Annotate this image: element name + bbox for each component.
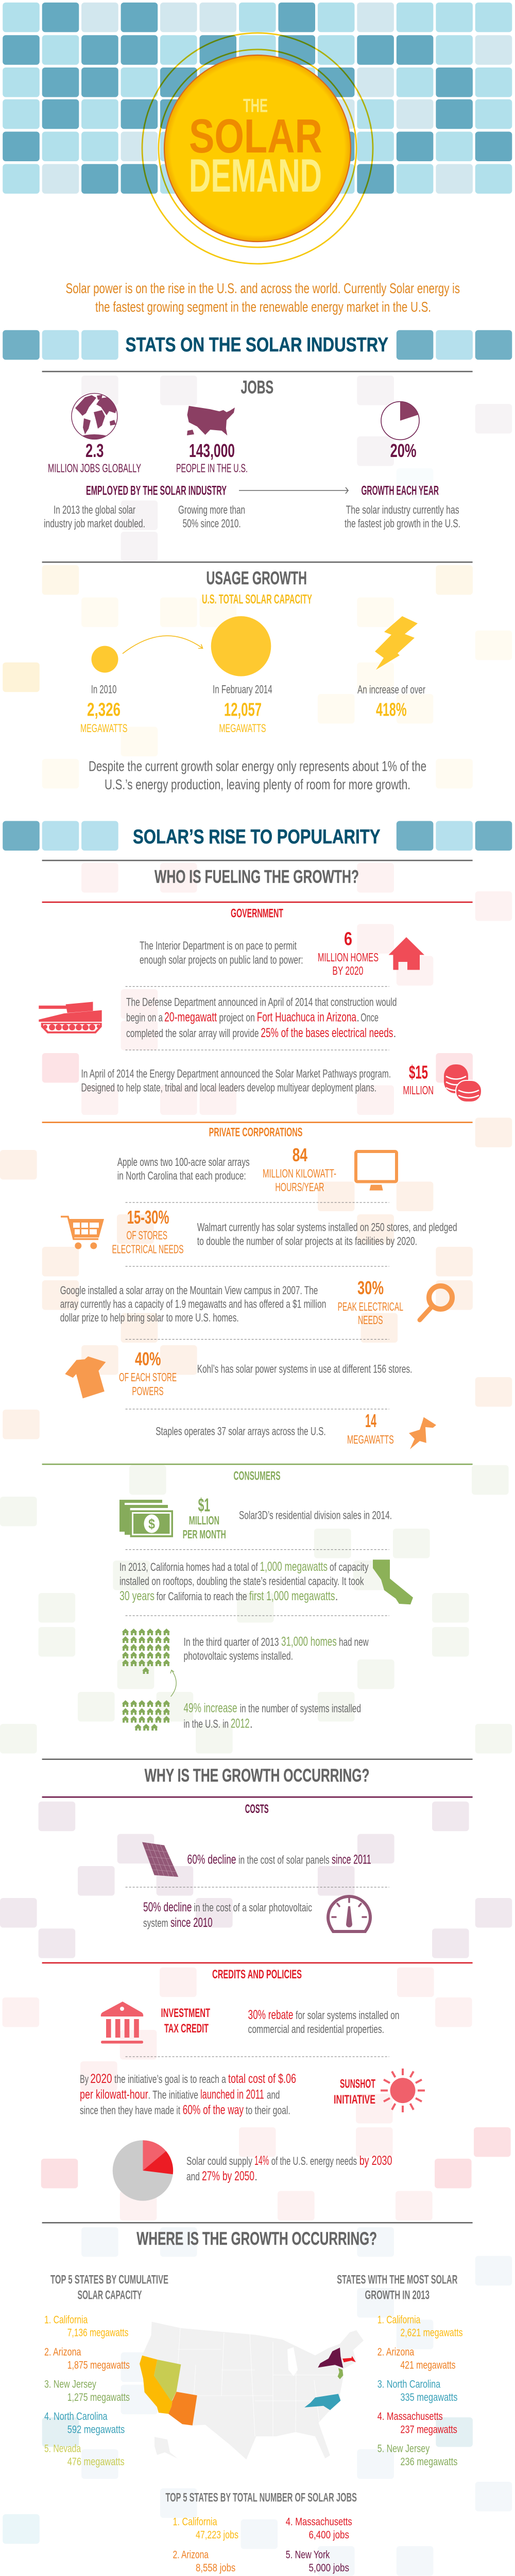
icon: magnifying glass xyxy=(420,1286,452,1320)
text: job market xyxy=(44,503,145,530)
text: 49 percent increase: . xyxy=(250,1718,253,1730)
stat: 30 percent peak needs: 30% xyxy=(357,1277,384,1298)
list: most growth in 2013: 5. New Jersey xyxy=(377,2443,430,2455)
text: 50 percent decline xyxy=(143,1900,312,1930)
list: top 5 by jobs: 5. New York xyxy=(286,2549,330,2561)
map: united states with highlighted states xyxy=(140,2321,364,2460)
heading: why is the growth occurring: WHY IS THE GROWTH OCCURRING? xyxy=(145,1765,370,1786)
title: THE xyxy=(243,95,268,116)
text: 50 percent decline: in the cost of a solar photovoltaic xyxy=(194,1901,312,1914)
label: sunshot initiative: INITIATIVE xyxy=(334,2093,375,2107)
text: 60 percent decline xyxy=(187,1853,371,1867)
list: top 5 by cumulative capacity: 1,275 megawatts xyxy=(67,2392,130,2403)
list: most growth in 2013: 3. North Carolina xyxy=(377,2379,440,2391)
icon: shopping cart xyxy=(61,1217,104,1249)
stat: 143,000 people: 143,000 xyxy=(189,440,235,461)
panel: costs xyxy=(126,1802,389,1931)
heading: who is fueling the growth: WHO IS FUELING THE GROWTH? xyxy=(154,867,359,887)
text: california rooftops: 30 years xyxy=(119,1589,154,1603)
heading: usage growth: USAGE GROWTH xyxy=(206,568,307,588)
text: apple: Apple owns two 100-acre solar arrays xyxy=(117,1156,250,1168)
text: apple: in North Carolina that each produce: xyxy=(117,1169,246,1182)
text: fastest job growth xyxy=(345,503,460,530)
list title: cumulative capacity: SOLAR CAPACITY xyxy=(77,2288,142,2302)
text: fastest job growth: the fastest job growth in the U.S. xyxy=(345,517,460,530)
text: google: array currently has a capacity of 1.9 megawatts and has offered a $1 million xyxy=(60,1297,326,1310)
text: california rooftops: for California to reach the xyxy=(157,1590,247,1603)
stat: 84 million kilowatt-hours: 84 xyxy=(293,1144,307,1165)
list: top 5 by cumulative capacity: 2. Arizona xyxy=(44,2346,81,2358)
section banner: stats on the solar industry: STATS ON THE SOLAR INDUSTRY xyxy=(126,334,388,356)
list: top 5 by cumulative capacity: 3. New Jersey xyxy=(44,2379,96,2391)
icon: house xyxy=(388,937,424,970)
text: 31,000 homes: In the third quarter of 2013 xyxy=(183,1636,279,1649)
text: sunshot goal xyxy=(80,2072,296,2117)
icon: cash: $ xyxy=(148,1516,155,1532)
large sun 2014 xyxy=(211,616,271,676)
text: could supply: 27% by 2050 xyxy=(202,2169,254,2183)
icon: previous homes xyxy=(122,1700,170,1731)
heading: where is the growth occurring: WHERE IS THE GROWTH OCCURRING? xyxy=(136,2228,377,2249)
panel: private corporations xyxy=(60,1126,457,1449)
title: SOLAR xyxy=(189,109,322,163)
text: 31,000 homes xyxy=(183,1635,369,1663)
stat: 1 million per month: PER MONTH xyxy=(183,1528,226,1541)
text: sunshot goal: By xyxy=(80,2073,89,2086)
panel: government xyxy=(39,906,482,1102)
panel: where is the growth occurring xyxy=(44,2228,463,2576)
arrow: growth between house groups xyxy=(170,1670,176,1697)
list: top 5 by cumulative capacity: 7,136 megawatts xyxy=(67,2327,128,2339)
list: top 5 by cumulative capacity xyxy=(44,2314,130,2468)
icon: gauge xyxy=(328,1896,370,1931)
stat: 15 million xyxy=(403,1061,434,1097)
text: sunshot goal: since then they have made it xyxy=(80,2104,180,2117)
stat: 40 percent: OF EACH STORE xyxy=(119,1370,177,1384)
list: top 5 by jobs: 47,223 jobs xyxy=(196,2529,238,2541)
text: 60 percent decline: since 2011 xyxy=(332,1853,371,1867)
list: most growth in 2013: 237 megawatts xyxy=(400,2424,457,2435)
text: sunshot goal: to their goal. xyxy=(246,2104,290,2117)
list: most growth in 2013: 4. Massachusetts xyxy=(377,2411,443,2422)
list: top 5 by cumulative capacity: 592 megawatts xyxy=(67,2424,125,2435)
text: google xyxy=(60,1284,326,1324)
icon: 31,000 homes xyxy=(122,1629,170,1674)
text: sunshot goal: . The initiative xyxy=(148,2089,198,2101)
text: 49 percent increase: in the U.S. in xyxy=(183,1718,229,1730)
stat: 15 million: $15 xyxy=(409,1061,428,1083)
text: sunshot goal: 2020 xyxy=(90,2072,112,2086)
hero: solar panel grid and sun title xyxy=(3,3,512,264)
list: most growth in 2013: 2,621 megawatts xyxy=(400,2327,463,2339)
text: sunshot goal: and xyxy=(267,2089,280,2101)
stat: 20 percent: 20% xyxy=(390,440,417,461)
list: top 5 by jobs: 8,558 jobs xyxy=(196,2562,235,2574)
list: top 5 by cumulative capacity: 476 megawatts xyxy=(67,2456,125,2468)
stat: 84 million kilowatt-hours: HOURS/YEAR xyxy=(275,1180,324,1194)
stat: 2014: In February 2014 xyxy=(213,683,272,696)
stat: 2010 xyxy=(80,683,127,735)
stat: 14 megawatts: 14 xyxy=(365,1410,376,1431)
stat: increase: 418% xyxy=(376,699,407,720)
label: employed by the solar industry: EMPLOYED BY THE SOLAR INDUSTRY xyxy=(86,483,227,498)
chart: 20 percent pie xyxy=(381,402,419,440)
text: job market: In 2013 the global solar xyxy=(54,503,135,516)
list: most growth in 2013: 236 megawatts xyxy=(400,2456,457,2468)
list: most growth in 2013 xyxy=(377,2314,463,2468)
text: california rooftops: . xyxy=(335,1590,338,1603)
text: defense department: The Defense Department announced in April of 2014 that construction would xyxy=(126,996,397,1009)
text: staples: Staples operates 37 solar arrays across the U.S. xyxy=(156,1425,326,1438)
list: top 5 by jobs: 1. California xyxy=(173,2516,217,2528)
list title: solar jobs: TOP 5 STATES BY TOTAL NUMBER OF SOLAR JOBS xyxy=(165,2490,357,2505)
text: google: Google installed a solar array on the Mountain View campus in 2007. The xyxy=(60,1284,318,1297)
list: most growth in 2013: 421 megawatts xyxy=(400,2360,456,2371)
list: most growth in 2013: 2. Arizona xyxy=(377,2346,414,2358)
list: top 5 by cumulative capacity: 1. California xyxy=(44,2314,88,2326)
subheading: consumers: CONSUMERS xyxy=(233,1469,281,1483)
stat: 2010: In 2010 xyxy=(91,683,116,696)
stat: 15 million: MILLION xyxy=(403,1083,434,1097)
label: growth each year: GROWTH EACH YEAR xyxy=(362,483,439,498)
text: kohl's: Kohl’s has solar power systems in use at different 156 stores. xyxy=(197,1362,412,1376)
icon: tank xyxy=(39,1002,102,1033)
stat: 2.3 million jobs: MILLION JOBS GLOBALLY xyxy=(48,461,141,474)
label: investment tax credit: INVESTMENT xyxy=(161,2006,210,2020)
text: sunshot goal: per kilowatt-hour xyxy=(80,2088,148,2102)
text: 30 percent rebate: for solar systems installed on xyxy=(296,2009,400,2022)
list: top 5 by jobs: 4. Massachusetts xyxy=(286,2516,352,2528)
text: 31,000 homes: 31,000 homes xyxy=(281,1635,337,1649)
icon: lightning bolt xyxy=(375,616,418,670)
title: DEMAND xyxy=(189,150,322,202)
subheading: costs: COSTS xyxy=(245,1802,269,1816)
stat: 40 percent: 40% xyxy=(135,1348,161,1369)
text: california rooftops: first 1,000 megawatts xyxy=(249,1589,335,1603)
text: defense department: completed the solar array will provide xyxy=(126,1027,259,1040)
text: 49 percent increase: 49% increase xyxy=(183,1701,237,1716)
stat: 40 percent xyxy=(119,1348,177,1398)
chart: share of us energy pie xyxy=(113,2140,173,2201)
stat: 2014 xyxy=(213,683,272,735)
text: california rooftops: of capacity xyxy=(330,1561,369,1573)
sun rings xyxy=(142,33,373,264)
text: could supply: 14% xyxy=(254,2154,269,2168)
stat: 1 million per month: $1 xyxy=(198,1494,210,1516)
list: top 5 by jobs: 6,400 jobs xyxy=(309,2529,349,2541)
text: 50 percent decline: since 2010 xyxy=(170,1916,213,1930)
icon: bank xyxy=(101,2002,143,2043)
text: 30 percent rebate: 30% rebate xyxy=(248,2008,294,2022)
subheading: government: GOVERNMENT xyxy=(231,906,283,920)
stat: 6 million homes: MILLION HOMES xyxy=(318,951,379,964)
stat: 2010: MEGAWATTS xyxy=(80,722,127,735)
list title: most growth: GROWTH IN 2013 xyxy=(365,2288,430,2302)
icon: solar panel xyxy=(142,1842,178,1877)
stat: 2010: 2,326 xyxy=(87,699,121,720)
icon: t-shirt xyxy=(65,1357,106,1398)
list: top 5 by cumulative capacity: 4. North Carolina xyxy=(44,2411,108,2422)
list title: cumulative capacity: TOP 5 STATES BY CUMULATIVE xyxy=(50,2273,168,2287)
text: interior department: The Interior Department is on pace to permit xyxy=(140,939,297,952)
text: sunshot goal: launched in 2011 xyxy=(200,2088,264,2102)
label: investment tax credit: TAX CREDIT xyxy=(164,2022,209,2036)
text: 60 percent decline: in the cost of solar panels xyxy=(238,1854,330,1867)
small sun 2010 xyxy=(92,646,118,673)
text: google: dollar prize to help bring solar to more U.S. homes. xyxy=(60,1311,239,1324)
list: most growth in 2013: 335 megawatts xyxy=(400,2392,457,2403)
stat: 30 percent peak needs xyxy=(338,1277,403,1327)
stat: 143,000 people xyxy=(176,440,248,474)
intro text xyxy=(66,280,460,315)
text: could supply: by 2030 xyxy=(359,2154,392,2168)
text: energy department xyxy=(81,1067,391,1094)
stat: 143,000 people: PEOPLE IN THE U.S. xyxy=(176,461,248,474)
text: defense department: begin on a xyxy=(126,1011,163,1024)
stat: 2.3 million jobs xyxy=(48,440,141,474)
text: defense department xyxy=(126,996,397,1040)
text: sunshot goal: the initiative’s goal is to reach a xyxy=(114,2073,226,2086)
list: top 5 by cumulative capacity: 5. Nevada xyxy=(44,2443,81,2455)
text: apple xyxy=(117,1156,250,1182)
subheading: private corporations: PRIVATE CORPORATIONS xyxy=(209,1126,302,1140)
text: 49 percent increase: 2012 xyxy=(231,1717,250,1731)
stat: 14 megawatts: MEGAWATTS xyxy=(347,1433,394,1446)
panel: jobs xyxy=(44,377,460,530)
text: growing: Growing more than xyxy=(178,503,245,516)
stat: 2.3 million jobs: 2.3 xyxy=(85,440,104,461)
text: walmart xyxy=(197,1221,457,1247)
title xyxy=(189,95,322,202)
text: could supply: . xyxy=(254,2170,258,2183)
list: top 5 by jobs xyxy=(173,2516,352,2576)
text: growing xyxy=(178,503,245,530)
stat: 30 percent peak needs: PEAK ELECTRICAL xyxy=(338,1300,403,1313)
stat: 6 million homes: BY 2020 xyxy=(332,964,363,977)
text: defense department: . xyxy=(356,1011,359,1024)
list title: cumulative capacity xyxy=(50,2273,168,2302)
text: energy department: In April of 2014 the Energy Department announced the Solar Market Pathways program. xyxy=(81,1067,391,1080)
text: defense department: . xyxy=(393,1027,397,1040)
text: could supply: and xyxy=(186,2170,200,2183)
section banner: stats on the solar industry xyxy=(3,330,512,360)
icon: globe xyxy=(72,394,117,443)
text: walmart: to double the number of solar projects at its facilities by 2020. xyxy=(197,1234,417,1247)
list title: most growth xyxy=(337,2273,457,2302)
text: 30 percent rebate xyxy=(248,2008,400,2036)
text: california rooftops: In 2013, California homes had a total of xyxy=(119,1561,258,1573)
solar panel grid xyxy=(3,3,512,194)
icon: cash xyxy=(119,1500,173,1537)
stat: increase xyxy=(357,683,425,720)
icon: push pin xyxy=(409,1417,436,1449)
text: 30 percent rebate: commercial and residential properties. xyxy=(248,2023,384,2036)
label: investment tax credit xyxy=(161,2006,210,2036)
stat: 14 megawatts xyxy=(347,1410,394,1446)
text: sunshot goal: total cost of $.06 xyxy=(228,2072,296,2086)
stat: 15-30 percent xyxy=(112,1207,183,1256)
text: defense department: Once xyxy=(360,1011,379,1024)
stat: 6 million homes: 6 xyxy=(344,928,352,949)
text: job market: industry job market doubled. xyxy=(44,517,145,530)
text: 49 percent increase: in the number of systems installed xyxy=(240,1702,361,1715)
stat: 1 million per month xyxy=(183,1494,226,1541)
stat: 15-30 percent: 15-30% xyxy=(127,1207,169,1228)
stat: 2014: 12,057 xyxy=(224,699,262,720)
arrow xyxy=(239,487,348,494)
text: despite current growth: U.S.’s energy production, leaving plenty of room for more growth. xyxy=(105,776,410,792)
text: energy department: Designed to help state, tribal and local leaders develop multiyear deployment plans. xyxy=(81,1081,376,1094)
text: fastest job growth: The solar industry currently has xyxy=(346,503,459,516)
text: defense department: 20-megawatt xyxy=(164,1010,217,1024)
text: california rooftops: 1,000 megawatts xyxy=(260,1560,328,1574)
text: could supply: Solar could supply xyxy=(186,2155,252,2167)
text: 31,000 homes: photovoltaic systems installed. xyxy=(183,1650,293,1663)
text: could supply xyxy=(186,2154,392,2183)
panel: consumers xyxy=(119,1469,413,1731)
icon: usa map xyxy=(187,406,235,435)
stat: 84 million kilowatt-hours xyxy=(263,1144,336,1194)
stat: 30 percent peak needs: NEEDS xyxy=(358,1313,383,1327)
sun xyxy=(164,55,351,242)
stat: 84 million kilowatt-hours: MILLION KILOWATT- xyxy=(263,1166,336,1180)
text: defense department: 25% of the bases electrical needs xyxy=(261,1026,393,1040)
stat: 15-30 percent: OF STORES xyxy=(127,1229,167,1242)
stat: 15-30 percent: ELECTRICAL NEEDS xyxy=(112,1243,183,1256)
label: sunshot initiative: SUNSHOT xyxy=(340,2077,375,2091)
panel: credits and policies xyxy=(80,1968,425,2201)
icon: monitor xyxy=(356,1151,397,1191)
text: defense department: project on xyxy=(219,1011,255,1024)
text: could supply: of the U.S. energy needs xyxy=(271,2155,357,2167)
icon: sun xyxy=(381,2069,425,2112)
text: california rooftops: installed on rooftops, doubling the state’s residential capacity. It took xyxy=(119,1574,364,1587)
label: sunshot initiative xyxy=(334,2077,375,2107)
subheading: credits and policies: CREDITS AND POLICIES xyxy=(212,1968,302,1981)
text: defense department: Fort Huachuca in Arizona xyxy=(257,1010,356,1024)
list: top 5 by cumulative capacity: 1,875 megawatts xyxy=(67,2360,130,2371)
text: solar3d: Solar3D’s residential division sales in 2014. xyxy=(239,1509,392,1522)
text: 49 percent increase xyxy=(183,1701,361,1731)
stat: 1 million per month: MILLION xyxy=(189,1514,219,1527)
section banner: solar's rise to popularity xyxy=(3,821,512,851)
text: 60 percent decline: 60% decline xyxy=(187,1853,236,1867)
stat: 40 percent: POWERS xyxy=(132,1384,164,1398)
list: top 5 by jobs: 5,000 jobs xyxy=(309,2562,349,2574)
text: 50 percent decline: 50% decline xyxy=(143,1900,192,1914)
section banner: solar's rise to popularity: SOLAR’S RISE TO POPULARITY xyxy=(133,826,381,848)
text: california rooftops xyxy=(119,1560,369,1603)
text: 50 percent decline: system xyxy=(143,1917,168,1929)
growth arrow xyxy=(123,636,203,654)
panel: usage growth xyxy=(80,568,426,792)
text: 31,000 homes: had new xyxy=(339,1636,369,1649)
stat: 2014: MEGAWATTS xyxy=(219,722,266,735)
list: most growth in 2013: 1. California xyxy=(377,2314,421,2326)
text: growing: 50% since 2010. xyxy=(183,517,241,530)
text: interior department xyxy=(140,939,303,967)
stat: increase: An increase of over xyxy=(357,683,425,696)
stat: 6 million homes xyxy=(318,928,379,977)
heading: jobs: JOBS xyxy=(241,377,273,398)
icon: california xyxy=(373,1560,413,1604)
icon: coins xyxy=(444,1064,482,1102)
text: interior department: enough solar projects on public land to power: xyxy=(140,954,303,967)
subheading: U.S. TOTAL SOLAR CAPACITY xyxy=(202,592,312,606)
list: top 5 by jobs: 2. Arizona xyxy=(173,2549,209,2561)
text: despite current growth xyxy=(89,758,426,792)
text: sunshot goal: 60% of the way xyxy=(183,2103,244,2117)
